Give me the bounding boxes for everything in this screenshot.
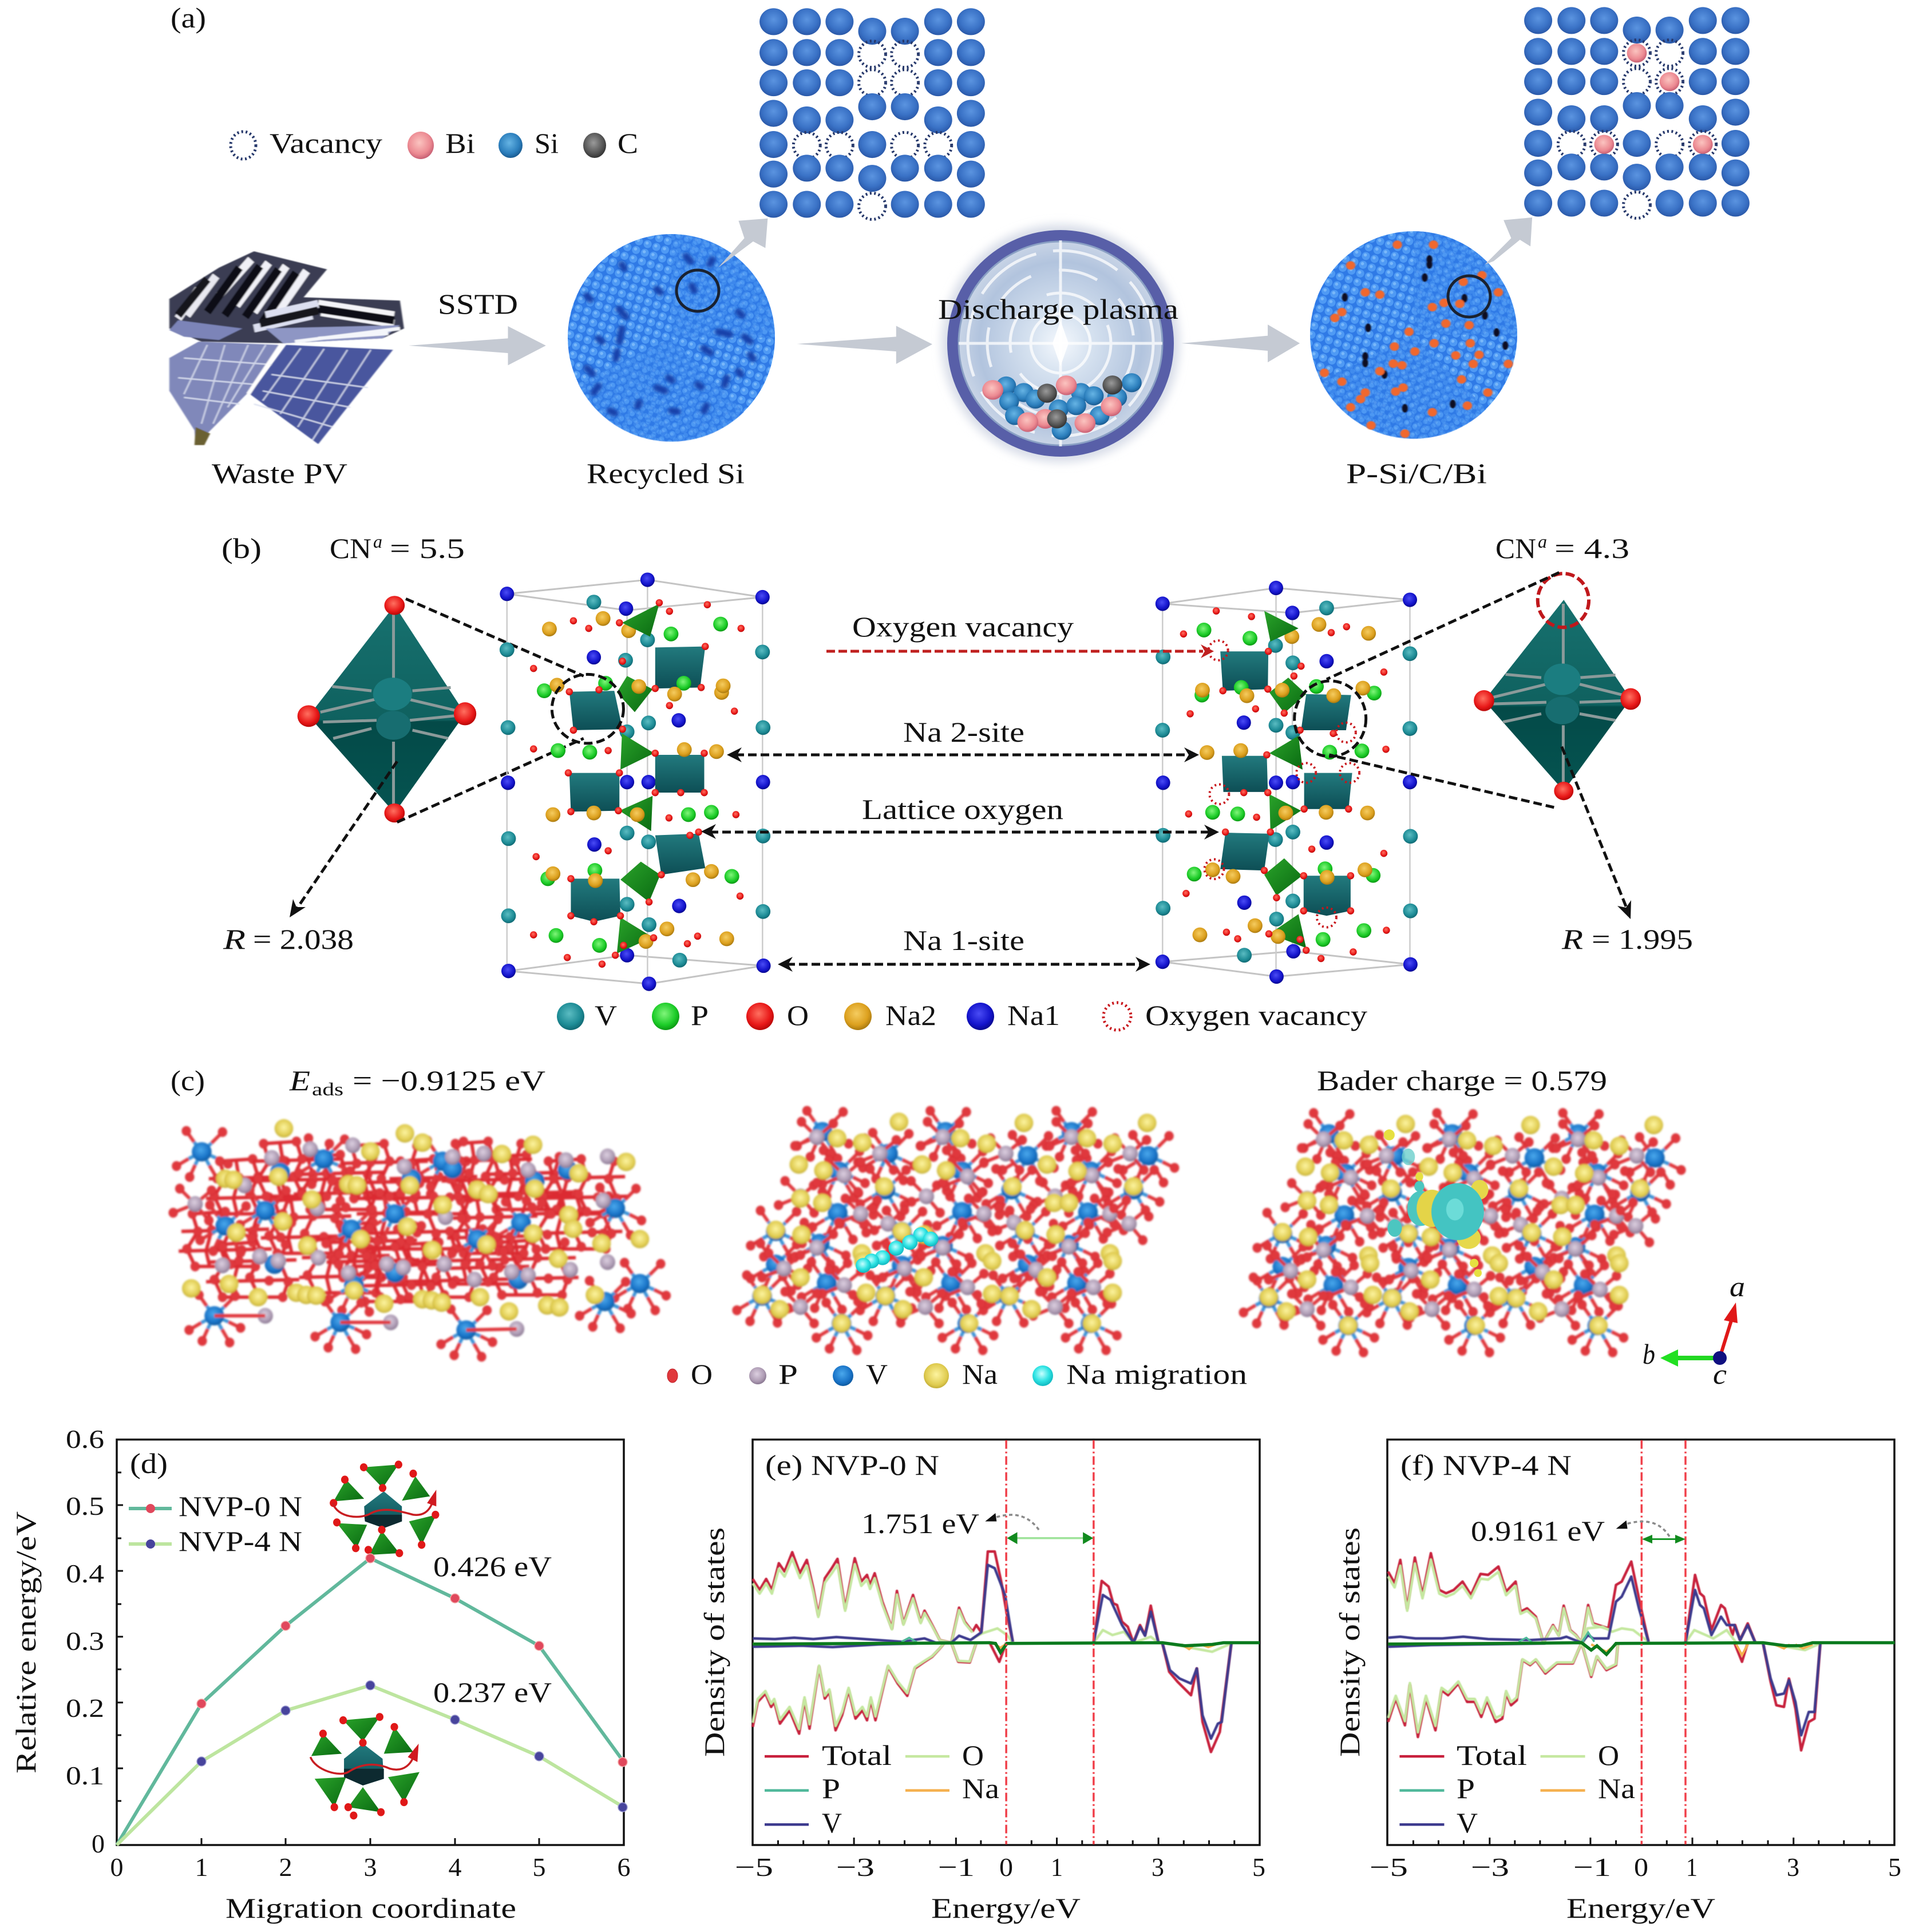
chart d x ticks: 5 xyxy=(532,1852,546,1882)
panel a label: (a) xyxy=(171,2,206,34)
label: CN a = 5.5 xyxy=(330,531,465,564)
arrow: photo to recycled Si xyxy=(409,326,546,365)
label: E ads = -0.9125 eV: = −0.9125 eV xyxy=(353,1064,545,1096)
label: CN a = 4.3: = 4.3 xyxy=(1554,532,1629,564)
O DOS xyxy=(1388,1559,1820,1732)
chart e x axis title: Energy/eV xyxy=(931,1892,1081,1924)
annotation: 0.237 eV: 0.237 eV xyxy=(433,1676,552,1708)
total DOS xyxy=(1388,1553,1820,1751)
label: R = 2.038 xyxy=(223,923,354,955)
V DOS xyxy=(753,1565,1231,1739)
chart e legend labels xyxy=(822,1739,999,1839)
V DOS xyxy=(1388,1577,1820,1735)
chart f x ticks: −5 xyxy=(1370,1852,1408,1882)
chart f legend labels: V xyxy=(1457,1807,1478,1839)
curved pointer xyxy=(994,1515,1039,1530)
label: Bader charge = 0.579: Bader charge = 0.579 xyxy=(1317,1064,1607,1096)
arrow: Na 2-site double headed xyxy=(727,747,1199,762)
chart e x ticks: −3 xyxy=(836,1852,875,1882)
label: Waste PV: Waste PV xyxy=(212,457,347,489)
chart e legend labels: P xyxy=(822,1772,840,1804)
chart d x ticks: 4 xyxy=(449,1852,461,1882)
legend: panel a species: Bi xyxy=(445,127,475,159)
chart f x ticks: 5 xyxy=(1888,1852,1901,1882)
label: CN a = 4.3 xyxy=(1495,531,1629,564)
chart f heading: (f) NVP-4 N xyxy=(1400,1449,1572,1481)
chart d x ticks: 2 xyxy=(279,1852,292,1882)
marker circle on recycled Si xyxy=(676,270,719,311)
label: Discharge plasma: Discharge plasma xyxy=(938,293,1178,325)
chart f legend labels: Na xyxy=(1598,1772,1635,1804)
legend lines xyxy=(765,1755,809,1757)
O DOS xyxy=(753,1558,1231,1729)
chart e x ticks xyxy=(735,1852,1265,1882)
legend: panel a species: C xyxy=(618,127,638,159)
chart e legend labels: V xyxy=(822,1807,842,1839)
chart f legend labels: P xyxy=(1457,1772,1475,1804)
arrow: lattice oxygen double headed xyxy=(701,824,1219,840)
annotation: 0.426 eV: 0.426 eV xyxy=(433,1550,552,1582)
chart e x ticks: 1 xyxy=(1051,1852,1063,1882)
legend: panel c species: P xyxy=(778,1358,798,1390)
label: E ads = -0.9125 eV: ads xyxy=(312,1079,343,1099)
chart f legend labels: O xyxy=(1598,1739,1619,1771)
chart e x ticks: −5 xyxy=(735,1852,773,1882)
Fermi and band edge lines xyxy=(1641,1440,1685,1844)
label: Oxygen vacancy: Oxygen vacancy xyxy=(852,611,1074,643)
crystal 1: adsorption structure xyxy=(169,1119,671,1361)
legend: panel b species: O xyxy=(787,999,809,1031)
legend: panel b species: P xyxy=(691,999,709,1031)
legend: panel c species: Na xyxy=(962,1358,998,1390)
band gap arrow xyxy=(1013,1537,1087,1539)
chart d x ticks: 1 xyxy=(195,1852,208,1882)
label: CN a = 4.3: CN xyxy=(1495,532,1536,564)
legend: panel b species: Oxygen vacancy xyxy=(1145,999,1367,1031)
photo: waste PV panels xyxy=(169,251,404,445)
panel c label: (c) xyxy=(171,1064,205,1096)
chart e y axis title: Density of states xyxy=(698,1527,730,1757)
chart d y ticks: 0.4 xyxy=(66,1559,104,1588)
arrow: oxygen vacancy (red dashed) xyxy=(826,644,1214,658)
panel b label: (b) xyxy=(221,532,262,564)
inset bottom: migration path xyxy=(310,1713,420,1819)
crystal axes indicator: b xyxy=(1643,1338,1655,1370)
P DOS xyxy=(901,1638,917,1642)
label: Na 2-site: Na 2-site xyxy=(903,716,1024,748)
chart e legend labels: Total xyxy=(822,1739,892,1771)
chart f y axis title: Density of states xyxy=(1334,1527,1366,1757)
label: R = 2.038: = 2.038 xyxy=(253,923,354,955)
baseline xyxy=(753,1643,1260,1652)
arrow: recycled Si to vacancy lattice xyxy=(718,219,767,268)
lattice: P-Si/C/Bi with Bi in vacancies xyxy=(1524,7,1750,218)
label: P-Si/C/Bi: P-Si/C/Bi xyxy=(1346,457,1487,489)
band gap arrow xyxy=(1647,1538,1681,1540)
legend: panel c species: O xyxy=(691,1358,713,1390)
chart d y ticks: 0.6 xyxy=(66,1424,104,1454)
chart d x ticks: 0 xyxy=(110,1852,124,1882)
label: R = 1.995 xyxy=(1561,923,1693,955)
chart d y ticks: 0.5 xyxy=(66,1491,104,1521)
legend: panel c species xyxy=(667,1358,1247,1390)
left crystal structure xyxy=(500,572,771,991)
right crystal structure xyxy=(1155,581,1418,984)
chart d x ticks: 6 xyxy=(617,1852,631,1882)
chart d legend: NVP-0 N xyxy=(179,1490,302,1522)
chart e x ticks: 5 xyxy=(1252,1852,1265,1882)
right VO octahedron with zoom lines xyxy=(1327,572,1641,909)
label: E ads = -0.9125 eV: E xyxy=(289,1064,310,1096)
markers: NVP-0 N xyxy=(197,1554,627,1767)
legend: panel a species: Si xyxy=(535,127,559,159)
Fermi and band edge lines xyxy=(1006,1440,1094,1844)
chart d legend xyxy=(129,1490,302,1557)
label: R = 1.995: R xyxy=(1561,923,1583,955)
chart d x ticks xyxy=(110,1852,631,1882)
label: CN a = 5.5: a xyxy=(373,531,382,552)
crystal axes indicator: a xyxy=(1730,1270,1745,1302)
chart d y axis title: Relative energy/eV xyxy=(10,1511,42,1773)
chart d y ticks: 0.2 xyxy=(66,1693,104,1723)
label: CN a = 5.5: = 5.5 xyxy=(390,532,465,564)
chart f x ticks: 0 xyxy=(1634,1852,1648,1882)
inset top: migration path xyxy=(330,1460,439,1557)
lattice: recycled Si with vacancies xyxy=(759,8,985,219)
label: CN a = 5.5: CN xyxy=(330,532,371,564)
chart f legend labels: Total xyxy=(1457,1739,1527,1771)
label: Lattice oxygen: Lattice oxygen xyxy=(862,793,1063,825)
chart d panel label: (d) xyxy=(130,1447,168,1479)
baseline xyxy=(1388,1643,1895,1654)
label: Na 1-site: Na 1-site xyxy=(903,924,1024,956)
chart e legend labels: Na xyxy=(962,1772,999,1804)
chart f x axis title: Energy/eV xyxy=(1566,1892,1715,1924)
label: E ads = -0.9125 eV xyxy=(289,1064,545,1099)
Na DOS xyxy=(1388,1644,1813,1655)
charge density isosurface xyxy=(1384,1130,1489,1277)
crystal 3: Bader charge structure xyxy=(1239,1108,1685,1357)
chart f: DOS NVP-4 N xyxy=(1387,1440,1895,1845)
total DOS xyxy=(753,1551,1231,1752)
legend: panel a species xyxy=(231,127,638,159)
sphere: P-Si/C/Bi xyxy=(1310,231,1517,439)
arrow: P-Si/C/Bi to doped lattice xyxy=(1485,217,1532,264)
Na DOS xyxy=(753,1644,1216,1649)
legend: panel b species xyxy=(557,999,1367,1031)
markers: NVP-4 N xyxy=(197,1681,627,1812)
label: Recycled Si: Recycled Si xyxy=(587,457,745,489)
chart f gap value: 0.9161 eV xyxy=(1471,1515,1605,1547)
legend: panel c species: V xyxy=(866,1358,888,1390)
crystal axes indicator xyxy=(1643,1270,1745,1390)
legend: panel b species: Na1 xyxy=(1007,999,1060,1031)
label: SSTD: SSTD xyxy=(438,288,518,320)
arrow: Na 1-site double headed xyxy=(778,957,1150,972)
label: CN a = 4.3: a xyxy=(1538,531,1547,552)
chart e legend labels: O xyxy=(962,1739,984,1771)
chart e x ticks: −1 xyxy=(938,1852,975,1882)
label: R = 1.995: = 1.995 xyxy=(1592,923,1693,955)
legend: panel b species: V xyxy=(595,999,617,1031)
legend lines xyxy=(1399,1755,1444,1757)
chart d legend: NVP-4 N xyxy=(179,1525,302,1557)
chart d y ticks: 0.3 xyxy=(66,1626,104,1656)
sphere: recycled Si xyxy=(568,234,775,442)
series: NVP-4 N xyxy=(117,1685,624,1845)
legend: panel c species: Na migration xyxy=(1066,1358,1247,1390)
arrow: recycled Si to plasma xyxy=(797,326,932,364)
P DOS xyxy=(1519,1632,1594,1643)
chart e gap value: 1.751 eV xyxy=(861,1507,979,1539)
chart e: DOS NVP-0 N xyxy=(753,1440,1260,1845)
series: NVP-0 N xyxy=(117,1558,624,1845)
legend: panel a species: Vacancy xyxy=(270,127,382,159)
chart f x ticks: 3 xyxy=(1787,1852,1799,1882)
crystal axes indicator: c xyxy=(1713,1358,1727,1390)
chart f x ticks: −3 xyxy=(1471,1852,1509,1882)
chart e x ticks: 0 xyxy=(999,1852,1013,1882)
chart f x ticks: −1 xyxy=(1573,1852,1611,1882)
legend: panel b species: Na2 xyxy=(885,999,936,1031)
chart d y ticks xyxy=(66,1424,105,1858)
chart e x ticks: 3 xyxy=(1152,1852,1164,1882)
marker circle on P-Si/C/Bi xyxy=(1448,276,1490,317)
arrowhead: R right xyxy=(1617,900,1631,919)
arrow: plasma to P-Si/C/Bi xyxy=(1181,324,1300,362)
chart d x axis title: Migration coordinate xyxy=(225,1892,516,1924)
crystal 2: Na migration structure xyxy=(733,1106,1179,1355)
chart f x ticks xyxy=(1370,1852,1901,1882)
left VO octahedron with zoom lines xyxy=(296,596,584,909)
chart d: migration energy xyxy=(117,1440,627,1845)
chart f legend labels xyxy=(1457,1739,1635,1839)
chart e heading: (e) NVP-0 N xyxy=(765,1449,939,1481)
chart d y ticks: 0.1 xyxy=(66,1761,104,1790)
curved pointer xyxy=(1624,1522,1669,1537)
chart d y ticks: 0 xyxy=(92,1829,105,1858)
discharge plasma dish xyxy=(941,224,1180,462)
arrowhead: R left xyxy=(290,899,306,917)
Na migration path (cyan atoms) xyxy=(856,1227,939,1273)
chart f x ticks: 1 xyxy=(1686,1852,1698,1882)
chart d x ticks: 3 xyxy=(364,1852,377,1882)
label: R = 2.038: R xyxy=(223,923,246,955)
